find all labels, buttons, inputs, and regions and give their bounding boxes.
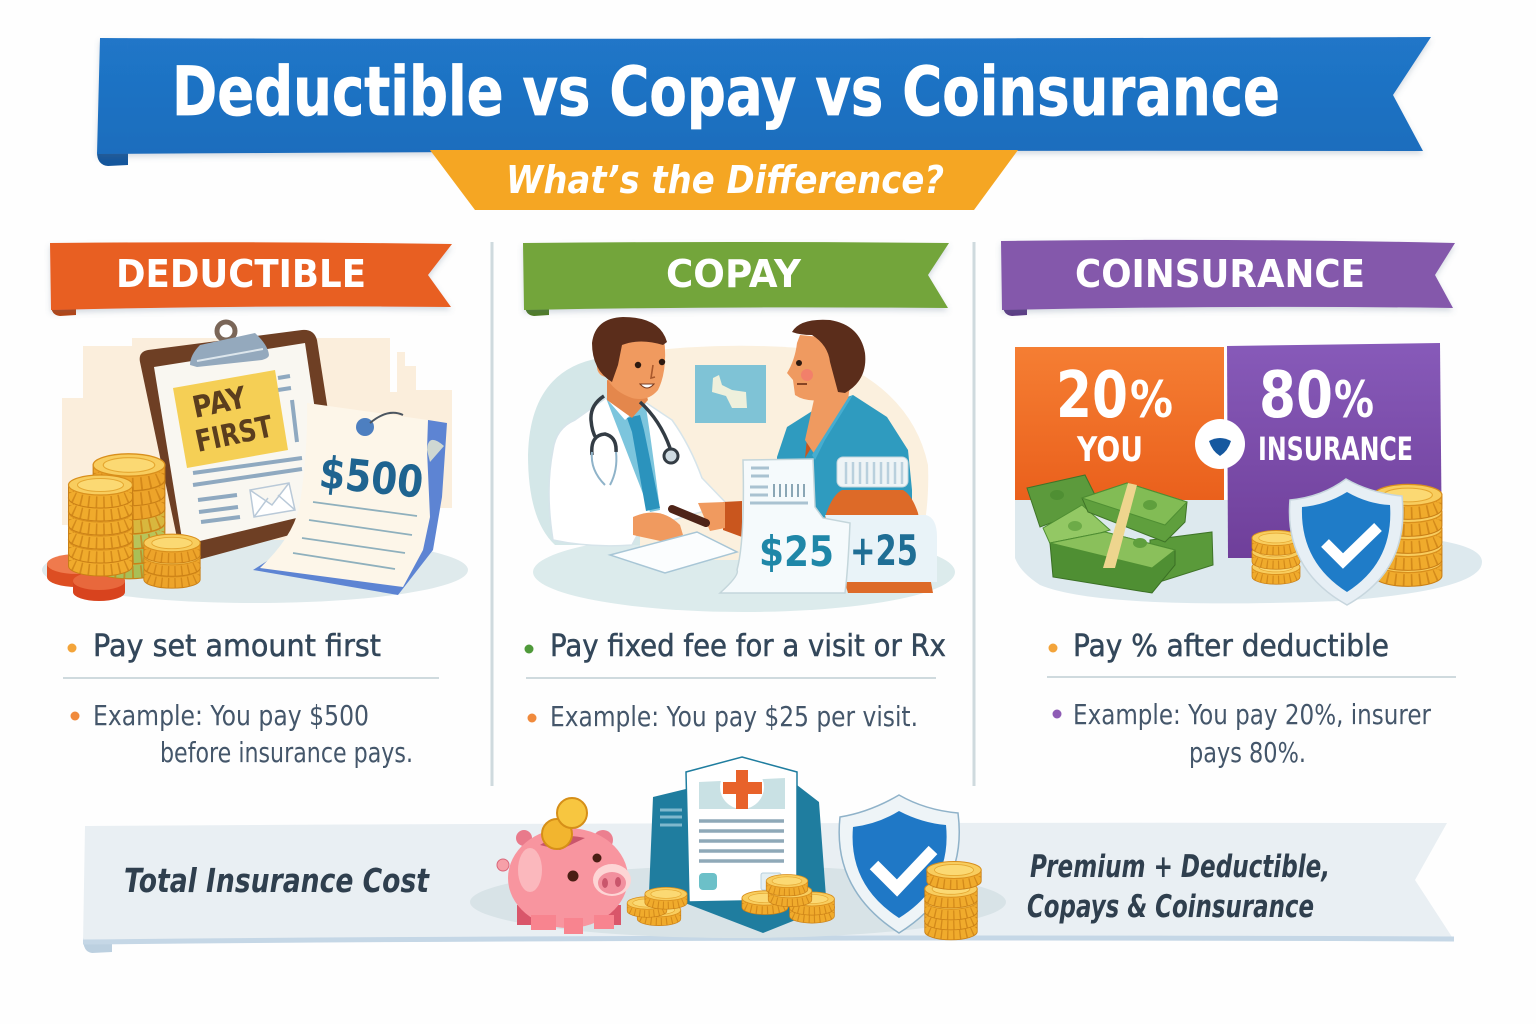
footer formula [1027,849,1330,925]
subtitle ribbon [430,150,1018,210]
pen [672,509,706,523]
title banner [97,37,1431,166]
center shield badge [1195,419,1245,469]
pay first sticky note: FIRST [192,409,276,460]
medicine bottle: +25 [850,526,918,575]
money pile [1027,475,1213,593]
deductible example: before insurance pays. [160,736,413,769]
receipt: $25 [759,527,834,576]
panel: deductible [42,242,468,769]
deductible banner: DEDUCTIBLE [116,252,366,296]
deductible illustration [42,322,468,603]
20 percent you block: YOU [1076,430,1143,470]
footer illustration shadow [470,866,1006,938]
deductible bullet 1: Pay set amount first [93,629,381,664]
80 percent insurance block: INSURANCE [1258,430,1413,468]
patient [777,320,912,540]
icon: footer coins [627,874,834,926]
panel: copay [523,242,955,733]
footer formula: Premium + Deductible, [1030,849,1330,885]
footer label: Total Insurance Cost [124,861,430,900]
medicine bottle [825,457,937,593]
title text: Deductible vs Copay vs Coinsurance [172,53,1280,132]
pay first sticky note: PAY [189,380,251,426]
paperwork [610,532,737,573]
icon: medical document [649,757,828,933]
coins and shield [1252,479,1442,605]
coinsurance banner [1001,240,1455,316]
subtitle text: What’s the Difference? [506,158,944,202]
coinsurance bullet 1: Pay % after deductible [1073,629,1389,664]
icon: footer shield with coins [839,795,981,940]
20 percent you block: 20 [1056,359,1128,433]
icon: piggy bank [497,798,631,934]
coinsurance example [1052,698,1431,769]
coinsurance banner: COINSURANCE [1075,252,1365,296]
copay banner [523,242,949,316]
pay first sticky note [173,370,288,468]
20 percent you block: % [1130,371,1173,429]
deductible example [70,699,413,769]
deductible banner [50,242,452,316]
copay example: Example: You pay $25 per visit. [550,700,918,733]
copay banner: COPAY [666,252,801,296]
column dividers [492,242,974,786]
coin stacks [47,454,200,601]
panel: coinsurance [1001,240,1482,769]
footer formula: Copays & Coinsurance [1027,889,1314,925]
copay illustration [528,317,955,612]
$500 bill [253,403,447,595]
80 percent insurance block: % [1334,371,1374,429]
receipt [720,459,850,593]
80 percent insurance block [1227,343,1442,558]
wall picture [695,365,766,423]
clipboard [140,322,345,562]
20 percent you block [1015,347,1224,500]
footer banner: total insurance cost [83,757,1454,953]
coinsurance example: Example: You pay 20%, insurer [1073,698,1431,731]
copay bullet 1: Pay fixed fee for a visit or Rx [550,629,946,664]
coinsurance example: pays 80%. [1189,736,1306,769]
doctor [549,317,742,546]
deductible example: Example: You pay $500 [93,699,369,732]
$500 bill: $500 [317,447,426,509]
80 percent insurance block: 80 [1259,359,1333,433]
coinsurance illustration [1015,343,1482,605]
